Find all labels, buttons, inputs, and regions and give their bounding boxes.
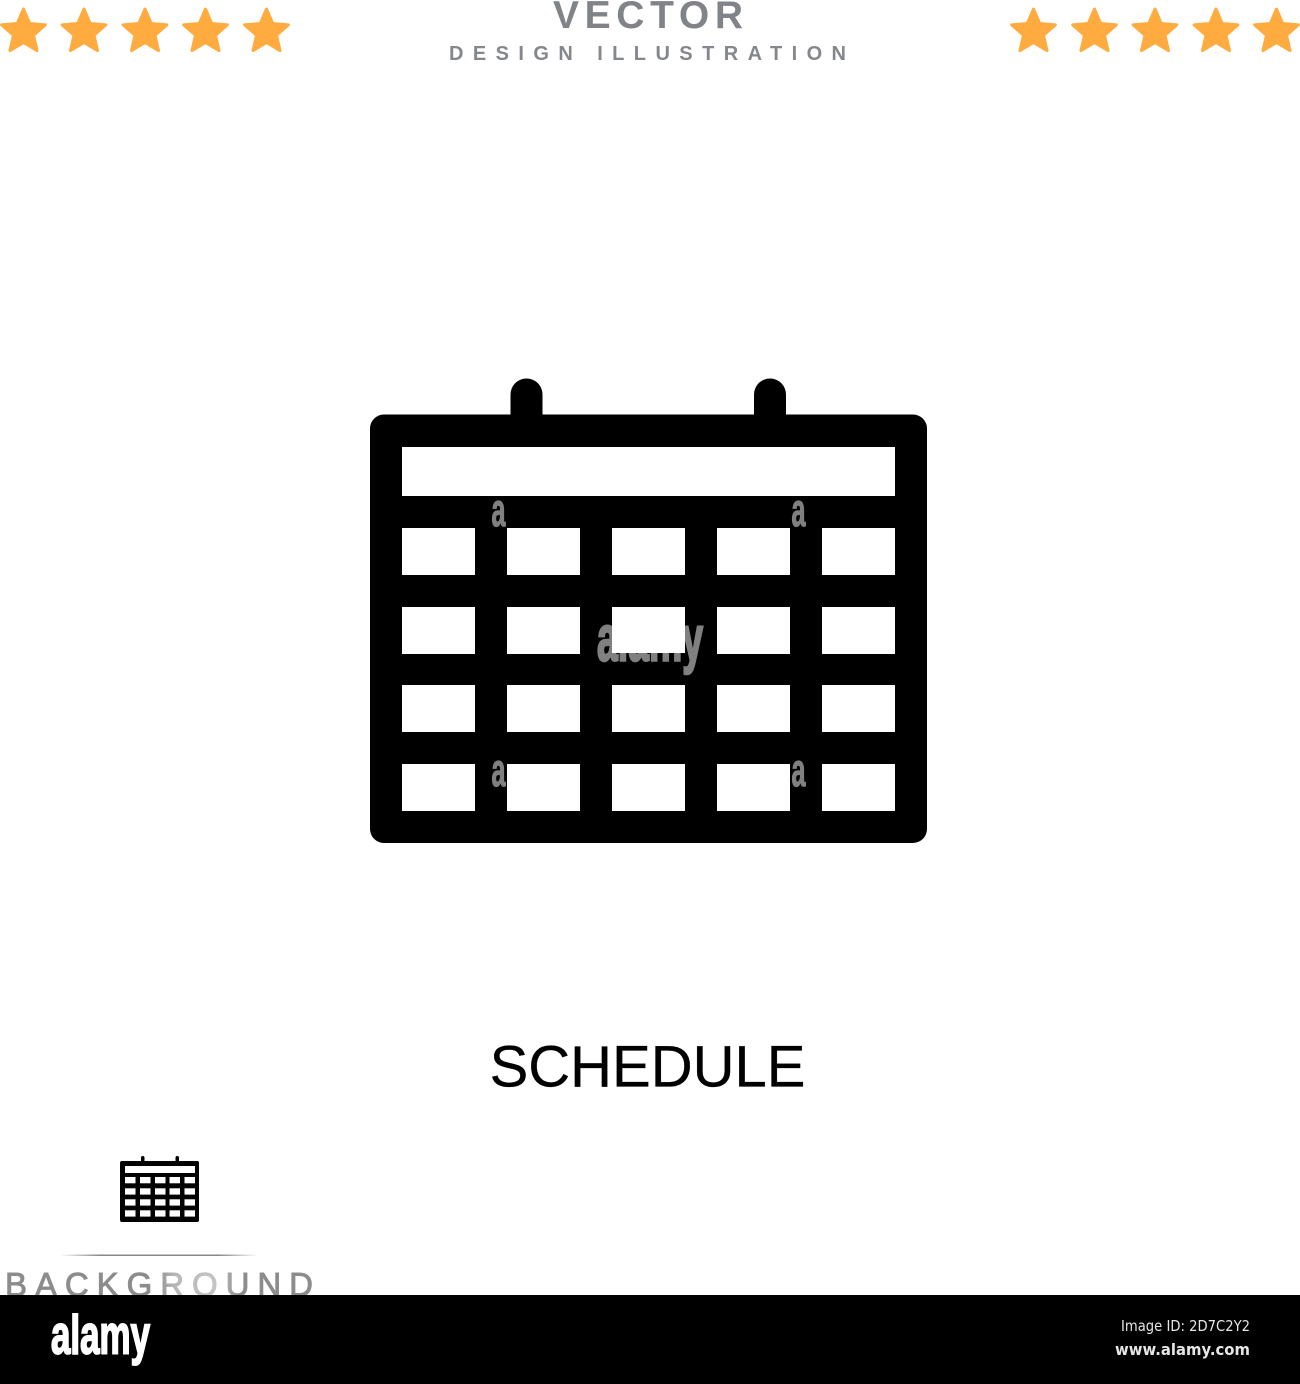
small calendar tabs <box>141 1156 179 1164</box>
watermark: small a top right: a <box>792 484 806 536</box>
calendar binding tab right <box>754 378 786 438</box>
watermark: alamy centre: alamy <box>597 602 703 674</box>
left star rating <box>2 9 288 51</box>
image id: Image ID: 2D7C2Y2 <box>1121 1317 1250 1335</box>
watermark: small a bottom right: a <box>792 744 806 796</box>
label: BACKGROUND: BACKGROUND <box>5 1266 313 1303</box>
footer background <box>0 1295 1300 1384</box>
website url: www.alamy.com <box>1115 1340 1250 1359</box>
icon title: SCHEDULE: SCHEDULE <box>490 1034 805 1100</box>
small calendar body <box>120 1161 199 1222</box>
icon: small calendar <box>120 1156 199 1222</box>
small calendar header strip <box>125 1166 195 1173</box>
calendar binding tab left <box>510 378 542 438</box>
subheading: DESIGN ILLUSTRATION: DESIGN ILLUSTRATION <box>449 43 846 65</box>
calendar header strip <box>402 447 895 496</box>
icon: large calendar <box>370 378 927 843</box>
calendar day cells <box>402 528 895 811</box>
right star rating <box>1012 9 1298 51</box>
footer bar <box>0 1295 1300 1384</box>
logo: alamy: alamy <box>51 1304 150 1366</box>
small calendar cells <box>125 1177 195 1217</box>
watermark: small a bottom left: a <box>492 744 506 796</box>
watermark: small a top left: a <box>492 484 506 536</box>
calendar body <box>370 414 927 843</box>
